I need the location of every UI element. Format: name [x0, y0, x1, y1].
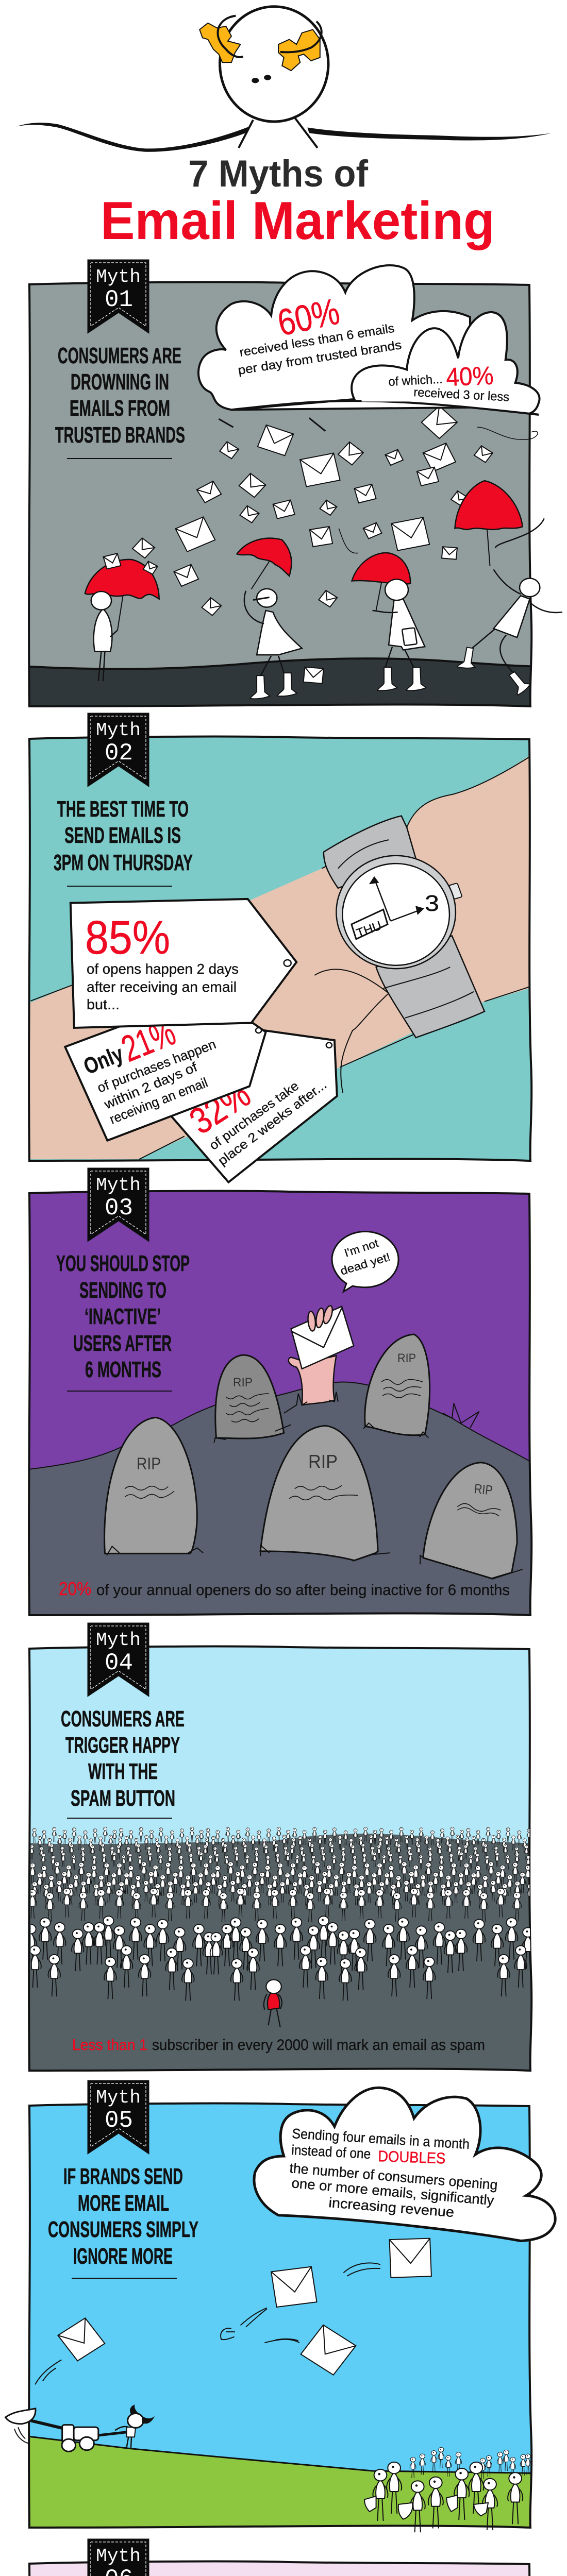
flying envelopes with motion lines: [35, 2239, 431, 2384]
people with umbrellas: [85, 481, 562, 699]
header character: head with laurel wreath: [16, 7, 552, 152]
ribbon: myth 06: [88, 2539, 149, 2576]
ribbon: myth 05: 05: [105, 2107, 133, 2134]
heading: myth 04: CONSUMERS ARE: [61, 1706, 185, 1732]
clouds with statistics: received less than 6 emails: [239, 321, 395, 360]
cloud with statistic: increasing revenue: [328, 2195, 455, 2220]
heading: myth 05: MORE EMAIL: [78, 2191, 169, 2216]
speech bubble: dead yet!: [339, 1250, 392, 1278]
clouds with statistics: 60%: [274, 291, 343, 344]
tag: 21%: of purchases happen: [95, 1036, 218, 1096]
heading: myth 01: CONSUMERS ARE: [58, 343, 181, 368]
crowd on the hill: [364, 2447, 531, 2532]
tag: 21%: receiving an email: [107, 1075, 210, 1127]
ribbon: myth 02: 02: [105, 740, 133, 767]
statistic: less than 1: subscriber in every 2000 will mark an email as spam: [152, 2037, 485, 2054]
cloud with statistic: instead of one: [291, 2142, 371, 2162]
heading: myth 05: CONSUMERS SIMPLY: [48, 2217, 198, 2242]
ribbon: myth 01: Myth: [96, 266, 141, 287]
heading: myth 02: THE BEST TIME TO: [57, 796, 189, 822]
tag: 32%: of purchases take: [207, 1079, 302, 1153]
heading: myth 01: EMAILS FROM: [70, 396, 170, 421]
tag: 85%: 85%: [85, 911, 170, 964]
speech bubble: [332, 1231, 398, 1292]
heading: myth 05: IGNORE MORE: [73, 2244, 173, 2269]
arm: [25, 752, 535, 1159]
statistic: less than 1: Less than 1: [72, 2037, 147, 2054]
heading: myth 03: [56, 1251, 190, 1392]
tombstones: [105, 1334, 523, 1579]
panel: myth 03: [25, 1168, 535, 1622]
tag: 32%: [168, 1030, 337, 1182]
title: Email Marketing: [101, 191, 495, 251]
tombstones: RIP: [233, 1376, 253, 1389]
title: [101, 153, 495, 251]
ribbon: myth 05: [88, 2080, 149, 2154]
heading: myth 01: DROWNING IN: [71, 369, 169, 395]
cloud with statistic: the number of consumers opening: [289, 2160, 498, 2193]
wristwatch showing 3pm Thursday: [324, 816, 485, 1038]
clouds with statistics: received 3 or less: [413, 385, 510, 404]
tag: 85%: [71, 899, 296, 1028]
falling envelopes: [132, 406, 538, 684]
heading: myth 04: WITH THE: [88, 1759, 158, 1784]
heading: myth 02: [54, 796, 193, 887]
heading: myth 01: [55, 343, 185, 459]
panel: myth 06: [25, 2539, 535, 2576]
heading: myth 02: SEND EMAILS IS: [64, 823, 181, 848]
tag: 32%: place 2 weeks after...: [215, 1077, 329, 1168]
heading: myth 04: SPAM BUTTON: [71, 1786, 175, 1811]
tombstones: RIP: [397, 1351, 416, 1365]
tombstones: RIP: [473, 1481, 493, 1498]
graveyard hill: [25, 1382, 535, 1622]
figure in red: [264, 1980, 282, 2027]
heading: myth 03: ‘INACTIVE’: [85, 1304, 161, 1329]
ribbon: myth 03: Myth: [96, 1175, 141, 1196]
cloud with statistic: DOUBLES: [378, 2148, 446, 2167]
ribbon: myth 04: 04: [105, 1650, 133, 1676]
ribbon: myth 02: [88, 713, 149, 787]
zombie hand holding envelope: [284, 1305, 479, 1428]
speech bubble: I'm not: [343, 1236, 380, 1260]
tag: 85%: of opens happen 2 days: [87, 961, 239, 977]
ribbon: myth 01: [88, 260, 149, 333]
tag: 85%: after receiving an email: [87, 979, 237, 995]
ribbon: myth 06: Myth: [96, 2546, 141, 2567]
heading: myth 04: [61, 1706, 185, 1819]
statistic: 20%: 20%: [59, 1578, 91, 1599]
heading: myth 04: TRIGGER HAPPY: [65, 1733, 180, 1758]
panel: myth 02: [25, 713, 535, 1182]
heading: myth 02: 3PM ON THURSDAY: [54, 850, 193, 875]
tag: 21%: 21%: [116, 1012, 181, 1070]
wristwatch showing 3pm Thursday: 3: [425, 891, 439, 916]
ribbon: myth 03: [88, 1168, 149, 1242]
panel: myth 04: [25, 1623, 560, 2075]
catapult and horned figure: [6, 2406, 153, 2451]
wristwatch showing 3pm Thursday: THU: [355, 919, 383, 941]
cloud with statistic: Sending four emails in a month: [292, 2126, 470, 2152]
clouds with statistics: 40%: [445, 361, 494, 392]
clouds with statistics: per day from trusted brands: [237, 338, 403, 378]
crowd of stick figures: [25, 1827, 560, 2001]
ribbon: myth 04: [88, 1623, 149, 1697]
clouds with statistics: [198, 265, 540, 415]
cloud with statistic: [254, 2088, 555, 2241]
heading: myth 03: 6 MONTHS: [85, 1357, 161, 1382]
tag: 21%: [65, 1012, 266, 1141]
statistic: 20%: of your annual openers do so after being inactive for 6 months: [96, 1582, 510, 1599]
heading: myth 03: YOU SHOULD STOP: [56, 1251, 190, 1276]
tag: 21%: Only: [80, 1041, 127, 1079]
ribbon: myth 04: Myth: [96, 1630, 141, 1651]
cloud with statistic: one or more emails, significantly: [291, 2175, 495, 2208]
heading: myth 03: USERS AFTER: [73, 1331, 172, 1356]
ribbon: myth 01: 01: [105, 286, 133, 313]
ribbon: myth 02: Myth: [96, 720, 141, 741]
tag: 32%: 32%: [182, 1074, 258, 1142]
tombstones: RIP: [308, 1451, 338, 1472]
title: 7 Myths of: [188, 153, 369, 195]
heading: myth 05: IF BRANDS SEND: [63, 2164, 183, 2189]
heading: myth 03: SENDING TO: [79, 1278, 166, 1303]
panel: myth 01: [25, 260, 562, 713]
panel: myth 05: [6, 2080, 555, 2534]
ribbon: myth 05: Myth: [96, 2087, 141, 2108]
clouds with statistics: of which...: [388, 372, 443, 389]
green hill: [25, 2436, 535, 2534]
heading: myth 05: [48, 2164, 198, 2279]
tombstones: RIP: [137, 1454, 161, 1473]
heading: myth 01: TRUSTED BRANDS: [55, 422, 185, 448]
tag: 85%: but...: [87, 996, 120, 1012]
ground: [25, 1834, 535, 2075]
tag: 21%: within 2 days of: [102, 1059, 200, 1112]
ribbon: myth 03: 03: [105, 1195, 133, 1222]
